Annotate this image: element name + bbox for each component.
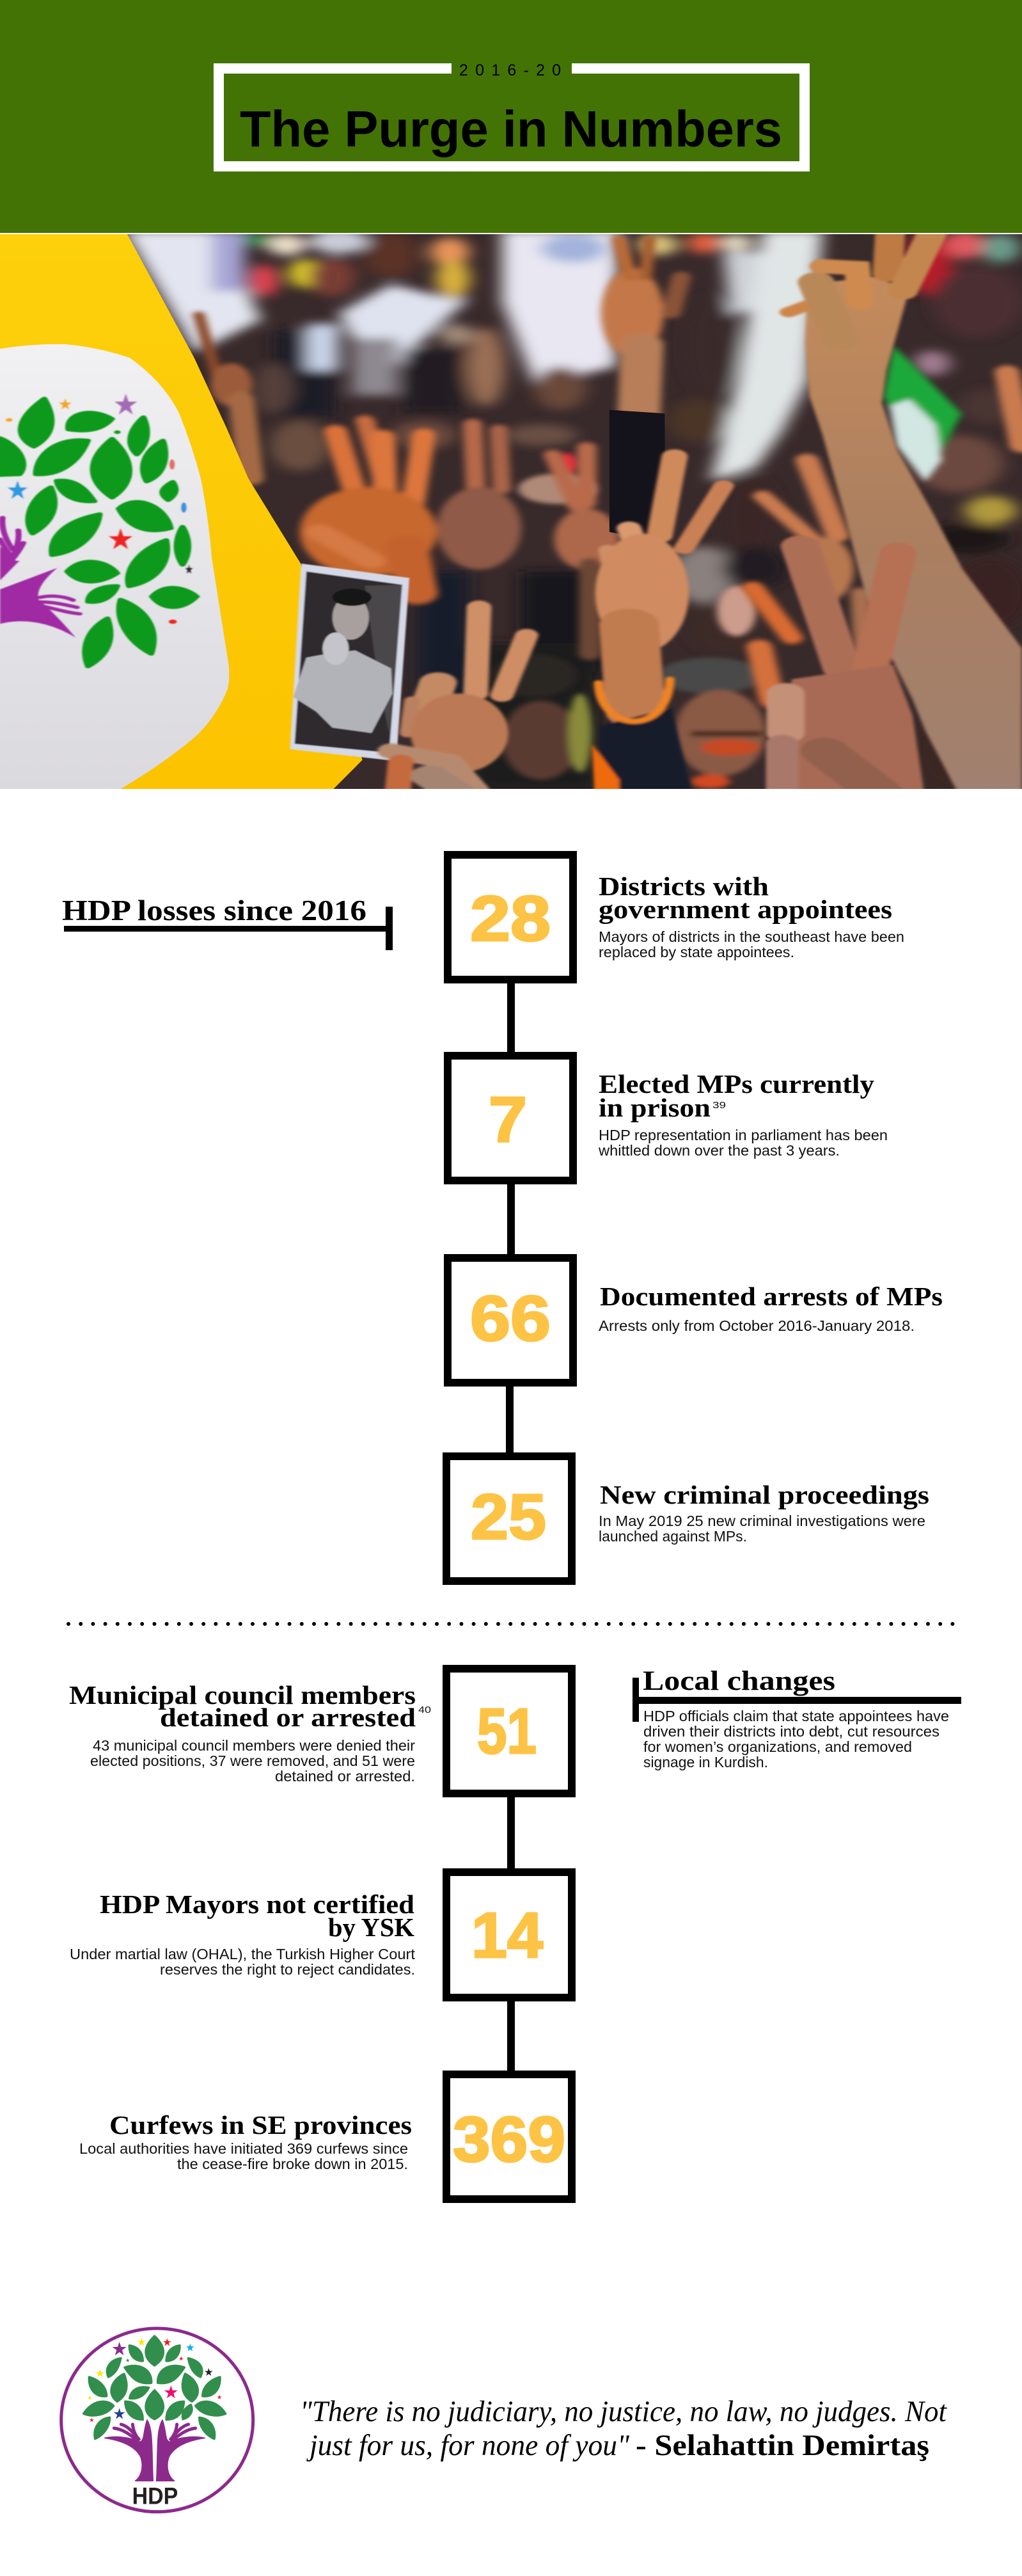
stat 28: districts: replaced by state appointees.	[599, 944, 794, 960]
stat 51: municipal council members: Municipal council members	[69, 1680, 416, 1710]
stat 7: MPs in prison: 7	[489, 1084, 527, 1156]
header banner	[0, 0, 1022, 233]
section label: HDP losses since 2016	[62, 894, 393, 950]
callout: local changes: HDP officials claim that state appointees have	[643, 1708, 949, 1724]
callout: local changes: signage in Kurdish.	[643, 1754, 768, 1770]
stat 14: mayors not certified	[70, 1872, 572, 1998]
black sleeve	[609, 410, 665, 539]
stat 7: MPs in prison: HDP representation in parliament has been	[599, 1127, 888, 1143]
quote: - Selahattin Demirtaş	[636, 2429, 929, 2462]
Demirtas photograph	[290, 564, 409, 761]
blurred raised hands in mid-ground	[199, 239, 1022, 701]
date label: 2016-20	[459, 61, 561, 79]
stat 51: municipal council members: 51	[477, 1696, 537, 1767]
quote: just for us, for none of you"	[306, 2429, 629, 2462]
callout: local changes: Local changes	[643, 1666, 835, 1696]
stat 25: criminal proceedings: launched against MPs.	[599, 1528, 747, 1545]
stat 14: mayors not certified: Under martial law (OHAL), the Turkish Higher Court	[70, 1946, 416, 1962]
stat 369: curfews: Curfews in SE provinces	[109, 2110, 412, 2140]
stat 7: MPs in prison: 39	[712, 1100, 726, 1111]
flag tree emblem hands	[0, 518, 79, 637]
callout: local changes: for women’s organizations, and removed	[643, 1738, 912, 1755]
stat 51: municipal council members: detained or arrested.	[275, 1768, 415, 1785]
stat 66: arrests of MPs: 66	[470, 1283, 551, 1355]
stat 14: mayors not certified: HDP Mayors not certified	[100, 1889, 414, 1919]
stat 66: arrests of MPs: Documented arrests of MPs	[600, 1282, 943, 1311]
flag tree emblem leaves	[0, 399, 197, 667]
flag stars	[6, 394, 193, 624]
quote: "There is no judiciary, no justice, no law, no judges. Not	[300, 2395, 947, 2428]
stat 25: criminal proceedings: New criminal proceedings	[600, 1480, 929, 1509]
yellow HDP flag	[0, 230, 363, 793]
stat 51: municipal council members: detained or arrested	[160, 1703, 416, 1732]
stat 14: mayors not certified: 14	[471, 1900, 543, 1971]
stat 25: criminal proceedings: 25	[471, 1481, 546, 1553]
stat 25: criminal proceedings: In May 2019 25 new criminal investigations were	[599, 1513, 925, 1529]
stat 25: criminal proceedings	[446, 1456, 929, 1581]
title: The Purge in Numbers	[240, 100, 782, 157]
section label: HDP losses since 2016: HDP losses since 2016	[62, 894, 366, 926]
stat 51: municipal council members: 43 municipal council members were denied their	[93, 1737, 415, 1754]
stat 28: districts: Districts with	[599, 871, 769, 901]
stat 28: districts: government appointees	[599, 894, 892, 924]
stat 7: MPs in prison	[448, 1056, 888, 1181]
stat 51: municipal council members: elected positions, 37 were removed, and 51 were	[90, 1753, 415, 1769]
stat 14: mayors not certified: by YSK	[328, 1912, 414, 1942]
logo hands	[105, 2420, 205, 2481]
stat 369: curfews	[79, 2074, 572, 2199]
logo leaves	[84, 2336, 226, 2439]
stat 7: MPs in prison: in prison	[599, 1093, 711, 1122]
quote	[300, 2395, 947, 2462]
timeline connectors	[506, 983, 515, 2071]
stat 66: arrests of MPs: Arrests only from October 2016-January 2018.	[599, 1317, 915, 1334]
stat 7: MPs in prison: Elected MPs currently	[599, 1069, 875, 1099]
callout: local changes: driven their districts into debt, cut resources	[643, 1723, 939, 1740]
stat 7: MPs in prison: whittled down over the past 3 years.	[598, 1142, 840, 1159]
logo stars	[88, 2338, 221, 2422]
stat 369: curfews: Local authorities have initiated 369 curfews since	[79, 2140, 408, 2157]
stat 28: districts: 28	[470, 883, 551, 955]
stat 66: arrests of MPs	[448, 1258, 943, 1383]
stat 369: curfews: the cease-fire broke down in 2015.	[177, 2156, 408, 2172]
logo wordmark: HDP	[132, 2483, 178, 2509]
callout: local changes	[633, 1666, 961, 1770]
stat 369: curfews: 369	[453, 2104, 565, 2175]
stat 28: districts: Mayors of districts in the southeast have been	[599, 928, 904, 945]
foreground hands	[391, 230, 1022, 793]
stat 51: municipal council members: 40	[418, 1705, 431, 1715]
stat 51: municipal council members	[69, 1669, 572, 1793]
green and white background flag	[492, 346, 961, 789]
title frame	[219, 68, 805, 166]
stat 14: mayors not certified: reserves the right to reject candidates.	[160, 1961, 415, 1978]
HDP logo	[59, 2326, 255, 2513]
hero photo: HDP rally crowd with flag and peace signs	[0, 234, 1022, 789]
stat 28: districts	[448, 855, 904, 980]
